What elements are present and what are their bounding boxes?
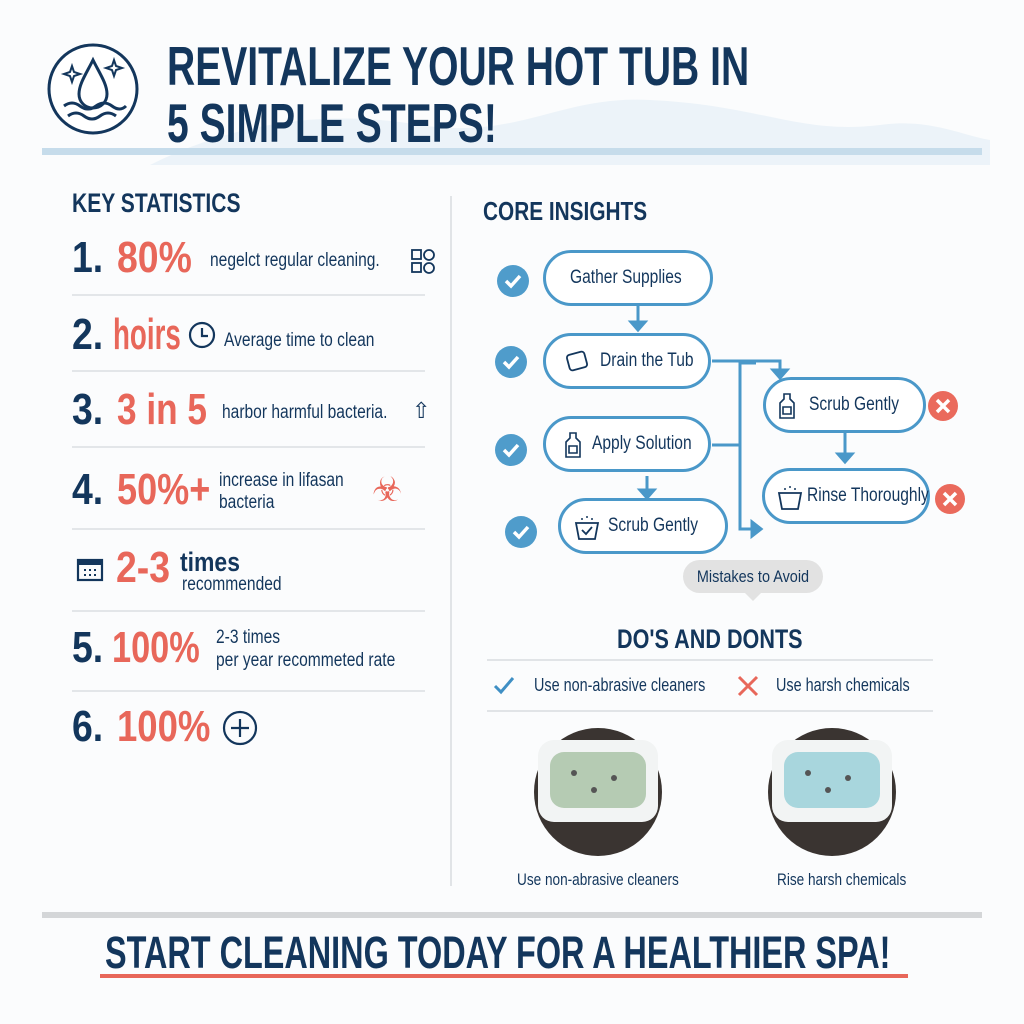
- stat: 2-3 times: recommended: [182, 574, 282, 595]
- caption left: Use non-abrasive cleaners: [517, 870, 679, 889]
- step: drain the tub: Drain the Tub: [600, 350, 694, 371]
- stat 2: 2.: [72, 310, 103, 359]
- stat 1: 80%: [117, 233, 192, 282]
- stat 1: [72, 233, 435, 282]
- x icons: [928, 391, 965, 514]
- step: scrub gently (branch): Scrub Gently: [809, 394, 899, 415]
- callout: mistakes to avoid: Mistakes to Avoid: [697, 567, 809, 586]
- title: 5 SIMPLE STEPS!: [167, 92, 497, 154]
- step: scrub gently: Scrub Gently: [608, 515, 698, 536]
- stat 4: 4.: [72, 465, 103, 514]
- dont: use harsh chemicals: Use harsh chemicals: [776, 675, 910, 695]
- step: gather supplies: Gather Supplies: [570, 267, 682, 288]
- stat 3: ⇧: [412, 398, 430, 423]
- stat 5: per year recommeted rate: [216, 650, 395, 671]
- step: rinse thoroughly: Rinse Thoroughly: [807, 485, 929, 506]
- stat: 2-3 times: 2-3: [116, 543, 170, 592]
- flowchart arrows: [628, 306, 856, 539]
- stat 3: 3 in 5: [117, 385, 207, 434]
- photo: hot tub clean: [534, 728, 662, 856]
- stat 6: 100%: [117, 702, 210, 751]
- stat: 2-3 times: [76, 543, 282, 595]
- heading: key statistics: KEY STATISTICS: [72, 188, 241, 218]
- title: [167, 35, 749, 154]
- stat 2: [72, 310, 374, 359]
- stat 4: ☣: [372, 471, 402, 509]
- stat 1: 1.: [72, 233, 103, 282]
- heading: do's and donts: DO'S AND DONTS: [617, 624, 803, 654]
- footer banner: START CLEANING TODAY FOR A HEALTHIER SPA!: [105, 927, 890, 978]
- background wave: [150, 100, 990, 165]
- step: apply solution: [543, 416, 711, 472]
- step: drain the tub: [543, 333, 711, 389]
- caption right: Rise harsh chemicals: [777, 870, 906, 889]
- stat 1: negelct regular cleaning.: [210, 250, 380, 271]
- icon: water drop logo: [48, 44, 138, 134]
- stat 4: [72, 465, 402, 514]
- stat 4: 50%+: [117, 465, 210, 514]
- stat 5: 5.: [72, 623, 103, 672]
- check icons: [495, 265, 537, 548]
- stat 5: [72, 623, 395, 672]
- step: gather supplies: [543, 250, 713, 306]
- photo: hot tub blue: [768, 728, 896, 856]
- stat 5: 100%: [112, 623, 200, 672]
- step: apply solution: Apply Solution: [592, 433, 692, 454]
- stat: 2-3 times: times: [180, 547, 240, 577]
- do: use non-abrasive cleaners: Use non-abrasive cleaners: [534, 675, 705, 695]
- title: REVITALIZE YOUR HOT TUB IN: [167, 35, 749, 97]
- stat 2: hoirs: [113, 310, 181, 359]
- callout: mistakes to avoid: [683, 560, 823, 601]
- stat 6: [72, 702, 258, 751]
- stat 2: Average time to clean: [224, 330, 374, 351]
- stat 5: 2-3 times: [216, 627, 280, 648]
- stat 6: 6.: [72, 702, 103, 751]
- stat 4: increase in lifasan: [219, 470, 344, 491]
- step: scrub gently: [558, 498, 728, 554]
- stat 4: bacteria: [219, 492, 274, 513]
- stat 3: 3.: [72, 385, 103, 434]
- heading: core insights: CORE INSIGHTS: [483, 196, 647, 226]
- step: rinse thoroughly: [762, 468, 930, 524]
- step: scrub gently (branch): [763, 377, 926, 433]
- stat 3: harbor harmful bacteria.: [222, 402, 387, 423]
- stat 3: [72, 385, 430, 434]
